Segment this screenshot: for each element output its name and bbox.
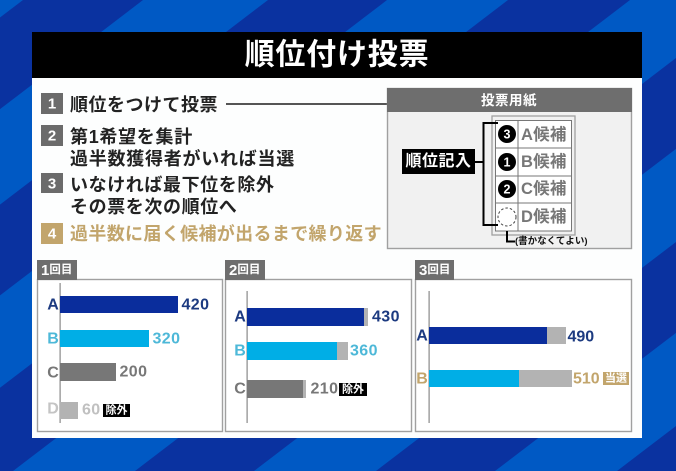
tab — [415, 260, 454, 280]
main white panel — [32, 78, 642, 438]
bar C with eliminated tag — [234, 380, 367, 398]
ballot table: 3 — [504, 128, 511, 142]
connector line to ballot — [226, 103, 387, 105]
bar D with eliminated tag: 60 — [82, 402, 101, 418]
panel: round 1 — [37, 260, 222, 432]
bar B: B — [234, 342, 246, 360]
tab: 2回目 — [229, 262, 260, 278]
ballot table: 1 — [504, 156, 511, 170]
step 2: 過半数獲得者がいれば当選 — [70, 148, 295, 169]
step 3: いなければ最下位を除外 — [70, 175, 275, 195]
tab: 1回目 — [41, 262, 72, 278]
ballot table: D候補 — [521, 207, 567, 226]
tab — [225, 260, 265, 280]
ballot table — [492, 116, 575, 235]
bar B — [47, 330, 180, 348]
note: optional: (書かなくてよい) — [515, 235, 588, 247]
panel: round 2 — [225, 260, 412, 432]
bar C with eliminated tag: 除外 — [342, 382, 364, 396]
step 2: 第1希望を集計 — [70, 126, 193, 147]
rank entry label with bracket: 順位記入 — [405, 152, 472, 170]
bar D with eliminated tag: D — [47, 400, 59, 418]
bar B: B — [47, 330, 59, 348]
title bar: 順位付け投票 — [245, 38, 429, 72]
step 2 — [41, 125, 295, 169]
tab — [37, 260, 77, 280]
step 1: 1 — [48, 96, 56, 112]
bar C — [47, 363, 147, 382]
step 3: その票を次の順位へ — [70, 197, 237, 217]
bar C with eliminated tag: C — [234, 380, 246, 398]
step 1: 順位をつけて投票 — [70, 95, 218, 115]
tab: 3回目 — [419, 262, 450, 278]
bar C: C — [47, 364, 59, 382]
bar B with winner tag: B — [416, 370, 428, 388]
bar B with winner tag: 510 — [573, 370, 600, 388]
bar C with eliminated tag: 210 — [310, 380, 338, 398]
bar A — [416, 327, 594, 346]
bar A — [234, 308, 400, 326]
panel: ballot paper — [387, 88, 632, 248]
bar A: 490 — [568, 328, 594, 346]
step 4: 4 — [48, 226, 57, 242]
bar B: 360 — [350, 342, 378, 360]
step 3: 3 — [48, 176, 56, 192]
bar B — [234, 342, 378, 360]
ballot table: A候補 — [521, 125, 567, 144]
ballot header — [387, 88, 632, 112]
bar A — [47, 296, 209, 314]
step 3 — [41, 173, 275, 217]
bar A: A — [234, 308, 246, 326]
bar A: A — [47, 296, 59, 314]
bar D with eliminated tag: 除外 — [106, 402, 128, 416]
ballot table: C候補 — [521, 179, 567, 198]
ballot table: B候補 — [521, 152, 567, 171]
title bar — [32, 32, 642, 78]
bar C: 200 — [120, 364, 147, 380]
bar B: 320 — [152, 330, 180, 348]
bar A: 430 — [372, 308, 400, 326]
step 4: 過半数に届く候補が出るまで繰り返す — [70, 223, 382, 244]
rank entry label with bracket — [402, 123, 498, 225]
bar D with eliminated tag — [47, 400, 130, 419]
bar B with winner tag — [416, 370, 629, 388]
ballot header: 投票用紙 — [481, 92, 537, 108]
panel: round 3 — [415, 260, 632, 432]
step 2: 2 — [48, 128, 56, 144]
bar A: A — [416, 328, 428, 344]
ballot table: 2 — [504, 182, 511, 196]
bar B with winner tag: 当選 — [605, 370, 627, 384]
note: optional — [507, 231, 588, 247]
bar A: 420 — [182, 296, 209, 314]
